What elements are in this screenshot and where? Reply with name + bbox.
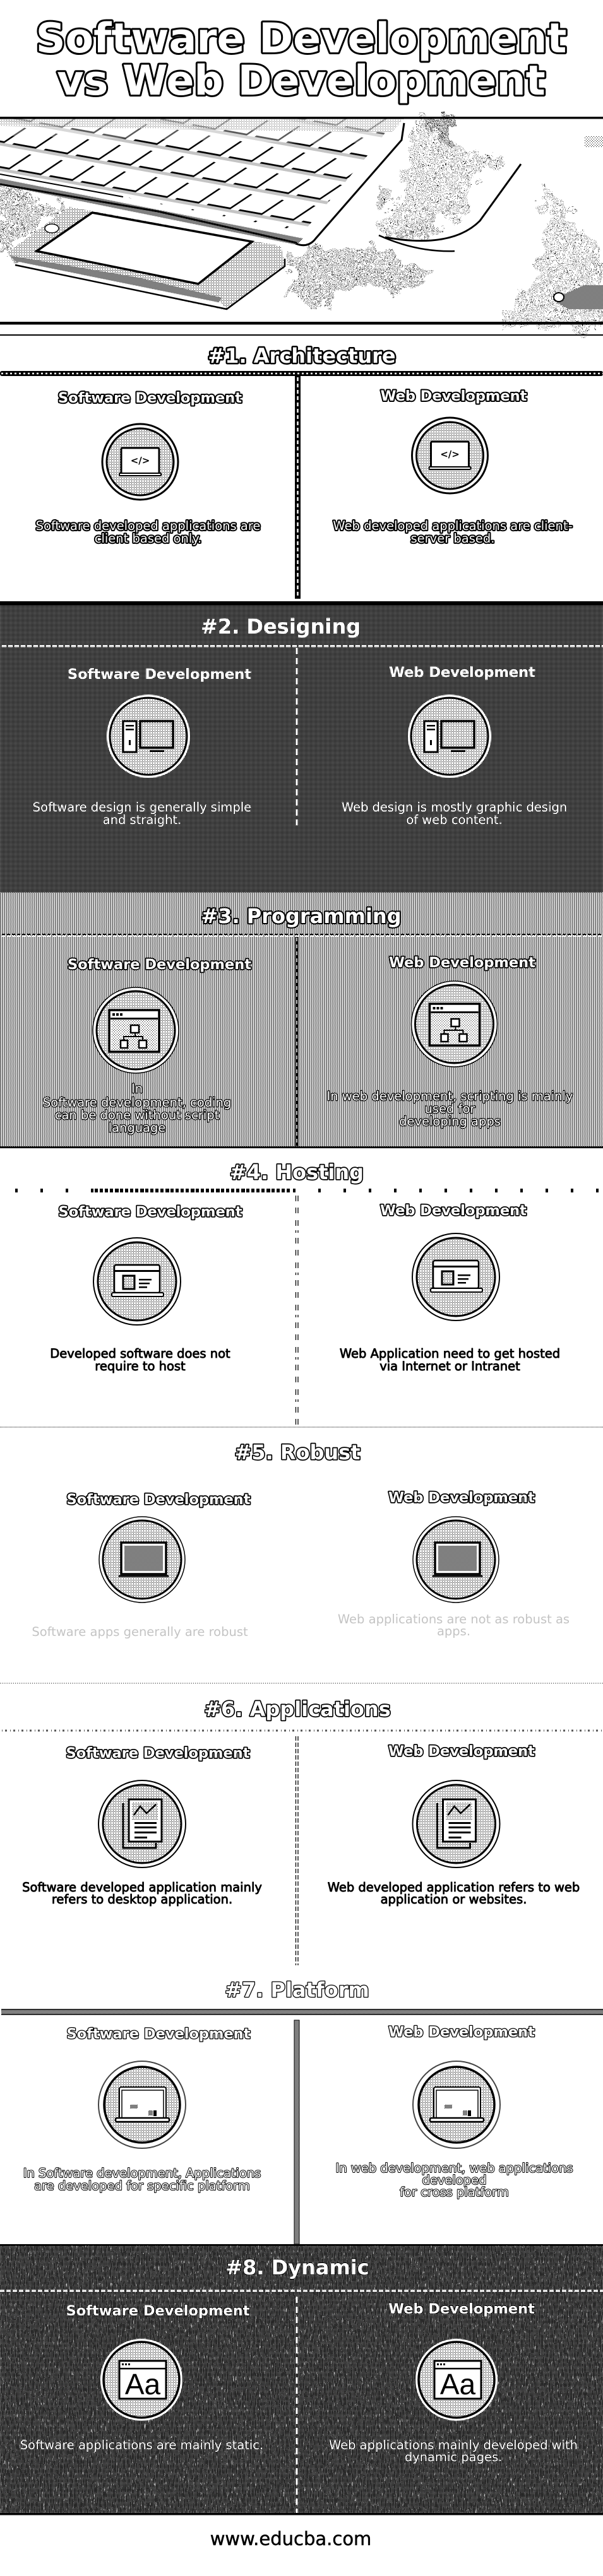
divider: vertical [296, 937, 298, 1146]
icon: laptop dark screen, software [99, 1517, 185, 1603]
icon: laptop profile, software [93, 1238, 181, 1325]
text: web programming: used for [425, 1102, 475, 1116]
heading: platform: #7. Platform [225, 1978, 369, 2002]
text: web platform: developed [422, 2173, 487, 2187]
text: software platform: In Software development, Applications [23, 2166, 261, 2180]
heading: hosting: #4. Hosting [230, 1160, 364, 1184]
text: web platform: for cross platform [400, 2185, 509, 2199]
panel: #7 Platform [1, 1978, 603, 2244]
text: web programming: In web development, scripting is mainly [326, 1089, 573, 1103]
text: web hosting [340, 1346, 560, 1373]
text: software applications: refers to desktop application. [52, 1892, 232, 1907]
text: software architecture [36, 519, 260, 546]
subheading: web development: Web Development [389, 664, 535, 681]
icon: laptop, web [413, 2061, 500, 2148]
text: web programming [326, 1089, 573, 1129]
text: web hosting: Web Application need to get hosted [340, 1346, 560, 1361]
panel: #1 Architecture [0, 334, 603, 599]
text: web applications: application or websites. [381, 1892, 527, 1907]
icon: sitemap window, web [412, 981, 498, 1067]
icon: code laptop, web [412, 418, 487, 493]
heading: robust: #5. Robust [234, 1440, 361, 1464]
divider: horizontal [15, 1189, 603, 1192]
text: web programming: developing apps [399, 1114, 501, 1129]
text: software dynamic: Software applications are mainly static. [20, 2438, 263, 2452]
text: software design [33, 800, 251, 827]
subheading: web development: Web Development [388, 1743, 535, 1760]
subheading: software development: Software Development [67, 2026, 251, 2042]
panel: #4 Hosting [0, 1160, 603, 1427]
text: software architecture: client based only. [95, 531, 201, 546]
text: software platform: are developed for specific platform [34, 2179, 250, 2193]
text: web robustness: apps. [437, 1624, 470, 1638]
text: web architecture: server based. [410, 531, 495, 546]
text: web robustness: Web applications are not as robust as [338, 1612, 570, 1626]
icon: laptop dark screen, web [413, 1517, 499, 1603]
subheading: software development: Software Development [67, 1491, 251, 1508]
text: web dynamic: Web applications mainly developed with [329, 2438, 578, 2452]
text: web dynamic [329, 2438, 578, 2464]
divider: horizontal [0, 371, 603, 376]
subheading: software development: Software Development [68, 666, 251, 683]
text: software programming: In [131, 1081, 143, 1096]
subheading: web development: Web Development [389, 955, 535, 971]
text: software applications [22, 1880, 262, 1907]
icon: desktop computer, web [408, 695, 491, 778]
icon: sitemap window, software [93, 987, 179, 1073]
divider: vertical [296, 2297, 298, 2513]
text: software hosting [50, 1346, 230, 1373]
divider: horizontal [2, 1730, 603, 1731]
divider: horizontal [1, 2009, 603, 2014]
text: web architecture [333, 519, 573, 546]
subheading: software development: Software Development [68, 956, 251, 973]
text: software design: and straight. [103, 813, 181, 827]
icon: font window, web: Aa [440, 2368, 476, 2401]
icon: code laptop, web: </> [440, 449, 460, 460]
divider: horizontal [2, 934, 603, 936]
icon: desktop computer, software [107, 695, 190, 778]
divider: vertical [296, 1736, 298, 1965]
icon: document chart, web [413, 1780, 500, 1867]
text: web design [342, 800, 567, 827]
divider: horizontal [0, 2290, 603, 2291]
subheading: web development: Web Development [388, 2301, 535, 2317]
hero photo: keyboard, phone and mouse [0, 114, 603, 328]
text: web design: Web design is mostly graphic design [342, 800, 567, 815]
icon: code laptop, software [102, 424, 178, 500]
icon: font window, web [415, 2339, 498, 2421]
title: Software Development [36, 15, 566, 62]
text: software programming: can be done without script [55, 1108, 220, 1122]
text: software programming: language [109, 1120, 165, 1135]
heading: dynamic: #8. Dynamic [225, 2255, 369, 2279]
subheading: web development: Web Development [388, 1490, 535, 1506]
divider: vertical [296, 1196, 298, 1427]
text: software design: Software design is generally simple [33, 800, 251, 815]
subheading: software development: Software Development [66, 1745, 250, 1761]
text: software robustness: Software apps generally are robust [32, 1625, 248, 1639]
subheading: web development: Web Development [381, 388, 527, 404]
divider: vertical [294, 2020, 299, 2244]
title [36, 15, 566, 105]
divider: horizontal [2, 645, 603, 647]
text: web hosting: via Internet or Intranet [379, 1359, 520, 1373]
text: software applications: Software developed application mainly [22, 1880, 262, 1895]
heading: designing: #2. Designing [201, 615, 361, 638]
subheading: web development: Web Development [388, 2024, 535, 2040]
text: web platform: In web development, web applications [335, 2161, 573, 2175]
text: software programming [43, 1081, 231, 1135]
icon: laptop, software [99, 2061, 186, 2148]
divider: vertical [296, 648, 298, 825]
text: software programming: Software development, coding [43, 1095, 231, 1110]
text: web applications: Web developed application refers to web [328, 1880, 580, 1895]
subheading: software development: Software Development [59, 1204, 242, 1220]
heading: architecture: #1. Architecture [208, 344, 396, 368]
icon: laptop profile, web [412, 1233, 499, 1320]
divider: vertical [295, 375, 301, 599]
subheading: web development: Web Development [380, 1203, 527, 1219]
text: software hosting: Developed software does not [50, 1346, 230, 1361]
panel: #2 Designing [0, 601, 603, 893]
panel: #3 Programming [0, 893, 603, 1148]
panel: #8 Dynamic [0, 2244, 603, 2515]
panel: #6 Applications [2, 1697, 603, 1965]
text: software hosting: require to host [95, 1359, 186, 1373]
icon: font window, software [100, 2339, 182, 2421]
icon: code laptop, software: </> [131, 455, 150, 466]
text: web design: of web content. [406, 813, 503, 827]
text: web applications [328, 1880, 580, 1907]
text: web robustness [338, 1612, 570, 1638]
text: web architecture: Web developed applications are client- [333, 519, 573, 533]
panel: #5 Robust [0, 1440, 603, 1683]
title: vs Web Development [57, 57, 546, 105]
heading: applications: #6. Applications [204, 1697, 391, 1721]
text: software architecture: Software developed applications are [36, 519, 260, 533]
text: software platform [23, 2166, 261, 2193]
icon: document chart, software [99, 1780, 186, 1867]
heading: programming: #3. Programming [201, 904, 402, 928]
footer: website: www.educba.com [210, 2528, 371, 2550]
icon: font window, software: Aa [125, 2368, 161, 2401]
text: web dynamic: dynamic pages. [405, 2450, 502, 2464]
subheading: software development: Software Development [58, 390, 242, 406]
text: web platform [335, 2161, 573, 2199]
subheading: software development: Software Development [66, 2303, 250, 2319]
